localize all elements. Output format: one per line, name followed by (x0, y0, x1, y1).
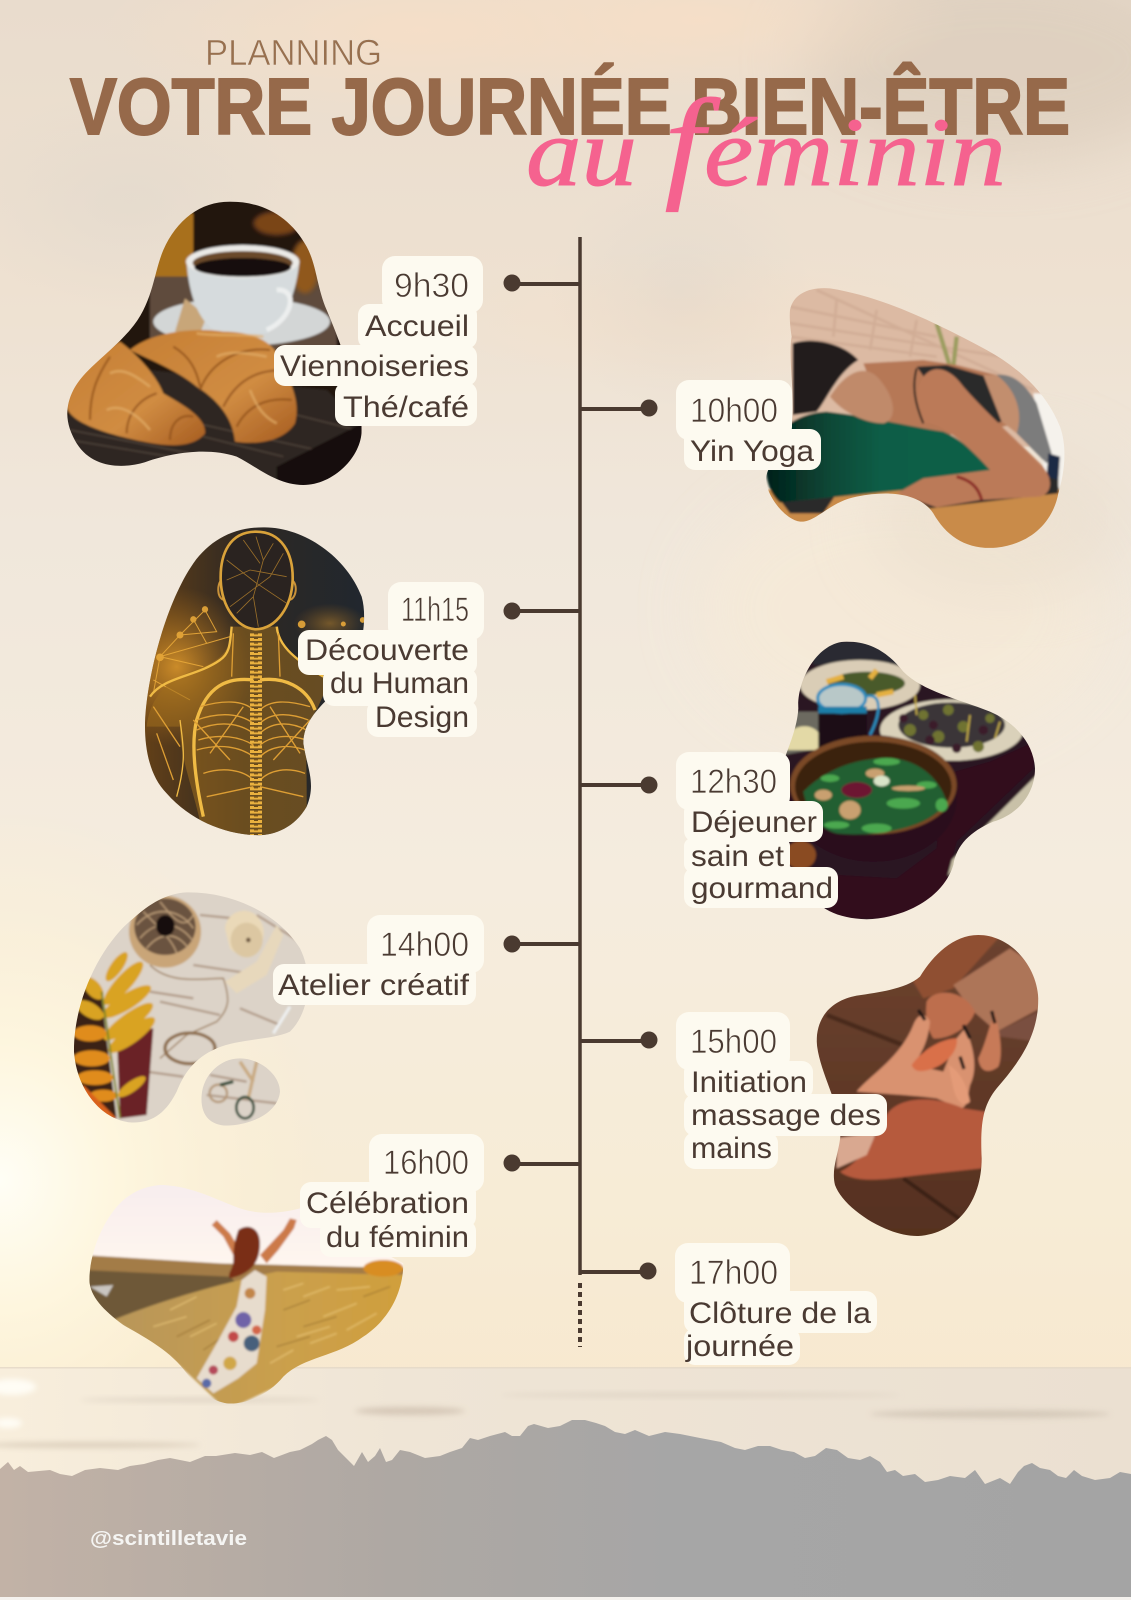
label: 17h00: Clôture de la (689, 1297, 871, 1330)
label: 12h30 (676, 752, 838, 908)
title block (70, 32, 1070, 213)
timeline (504, 237, 658, 1347)
label: 12h30: sain et (691, 840, 785, 873)
photo: human design body (145, 527, 364, 836)
photo: healthy lunch bowls (786, 642, 1035, 920)
label: 11h15: Design (375, 701, 469, 734)
label: 14h00: Atelier créatif (278, 969, 470, 1002)
label: 9h30: Thé/café (343, 391, 469, 424)
label: 11h15 (298, 582, 484, 737)
label: 10h00: Yin Yoga (690, 435, 814, 468)
label: 9h30: Viennoiseries (280, 350, 469, 383)
label: 14h00 (273, 915, 484, 1005)
label: 9h30: Accueil (365, 310, 469, 343)
label: 12h30: gourmand (691, 872, 833, 905)
label: 15h00: mains (691, 1132, 772, 1165)
label: 17h00: journée (685, 1330, 794, 1363)
label: 14h00: 14h00 (380, 926, 469, 964)
label: 15h00: 15h00 (690, 1023, 777, 1061)
heading: script subtitle: au féminin (526, 75, 1006, 213)
photo: coffee and croissants (67, 202, 362, 485)
footer handle: @scintilletavie (90, 1528, 247, 1550)
label: 15h00: Initiation (691, 1066, 807, 1099)
label: 16h00: du féminin (326, 1221, 469, 1254)
label: 16h00: 16h00 (383, 1144, 469, 1182)
label: 11h15: du Human (330, 667, 469, 700)
photo: hand massage (813, 925, 1043, 1242)
label: 11h15: 11h15 (401, 591, 469, 629)
label: 10h00 (676, 380, 821, 470)
heading: planning: PLANNING (205, 32, 382, 73)
label: 16h00: Célébration (306, 1187, 469, 1220)
label: 17h00 (675, 1243, 877, 1365)
label: 16h00 (300, 1134, 484, 1257)
label: 17h00: 17h00 (689, 1254, 778, 1292)
label: 11h15: Découverte (305, 634, 469, 667)
label: 12h30: Déjeuner (691, 806, 817, 839)
label: 10h00: 10h00 (690, 392, 778, 430)
photo: woman in golden field (83, 1180, 410, 1410)
label: 9h30: 9h30 (394, 267, 469, 305)
label: 15h00: massage des (691, 1099, 881, 1132)
photo: creative workshop palette (74, 892, 306, 1126)
label: 12h30: 12h30 (690, 763, 777, 801)
label: 15h00 (676, 1012, 887, 1169)
photo: yin yoga (766, 288, 1064, 548)
label: 9h30 (274, 256, 483, 426)
